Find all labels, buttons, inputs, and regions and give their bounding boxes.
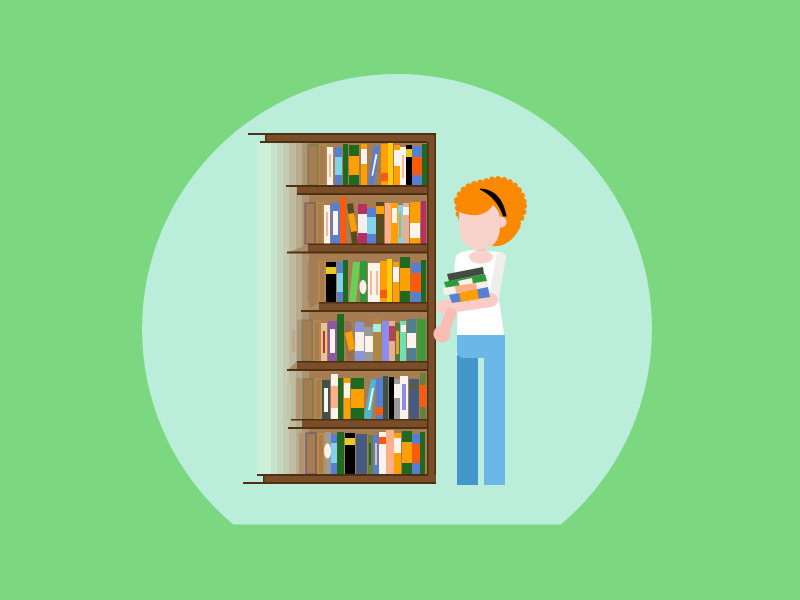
- headband: [480, 189, 506, 216]
- hair back: [470, 178, 524, 246]
- person: [434, 178, 524, 485]
- torso shirt: [454, 250, 504, 335]
- illustration: person with bookshelf: [142, 74, 652, 524]
- bookcase frame: [243, 133, 436, 484]
- trousers: [457, 335, 505, 485]
- face: [459, 205, 500, 250]
- shelf row 1 books: [308, 142, 427, 185]
- shelf boards: [286, 185, 427, 429]
- bookcase interior with fading bands: [257, 142, 427, 475]
- sleeve: [494, 257, 501, 298]
- shelf row 2 books: [305, 197, 426, 244]
- lower arm and hand: [434, 313, 451, 342]
- shelf row 3 books: [308, 257, 426, 303]
- neck and collar: [469, 244, 493, 264]
- shelf row 5 books: [288, 373, 426, 419]
- book stack: [443, 267, 490, 303]
- pale circle backdrop: [142, 74, 652, 524]
- ear: [496, 216, 506, 228]
- forearm across body: [443, 300, 491, 307]
- hair front: [457, 182, 500, 218]
- shelf row 6 books: [293, 430, 425, 474]
- shelf row 4 books: [292, 314, 426, 361]
- bookcase: [243, 133, 436, 484]
